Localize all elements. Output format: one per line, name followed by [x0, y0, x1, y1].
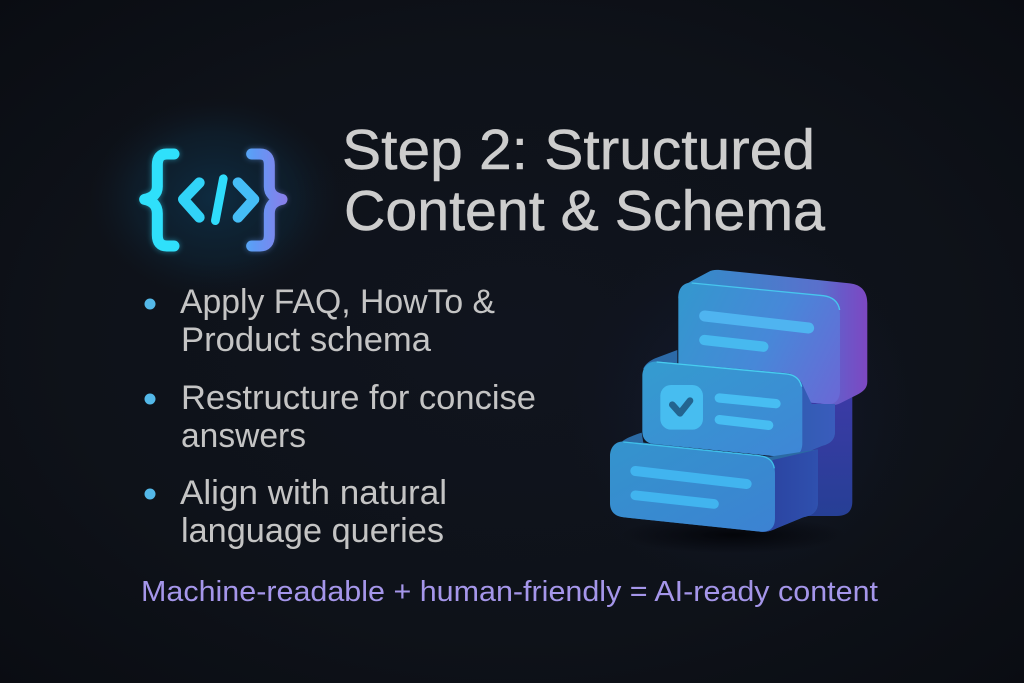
- bullet 3: Align with natural: [180, 474, 447, 512]
- left brace: [145, 154, 174, 246]
- bullet 3: [144, 474, 447, 550]
- bullet 2: [144, 379, 536, 455]
- text line: [719, 420, 769, 425]
- text line: [719, 398, 776, 404]
- bullet 1: [144, 283, 495, 359]
- illustration: stacked content cards: [565, 225, 925, 595]
- tagline: Machine-readable + human-friendly = AI-ready content: [141, 576, 878, 608]
- slash: [215, 179, 223, 221]
- title: [342, 118, 825, 243]
- bullet list: [144, 283, 536, 550]
- bottom card: [610, 433, 818, 532]
- text line: [635, 471, 747, 484]
- right chevron: [238, 183, 254, 217]
- top card: [678, 270, 867, 405]
- middle card: [642, 350, 835, 458]
- title: Step 2: Structured: [342, 118, 815, 182]
- left chevron: [183, 183, 199, 217]
- checkbox icon: [660, 385, 703, 430]
- text line: [705, 316, 809, 328]
- icon: code brackets: [90, 98, 340, 298]
- text line: [635, 495, 714, 504]
- bullet 2: answers: [181, 417, 306, 455]
- right brace: [252, 154, 282, 246]
- bullet 1: Product schema: [181, 321, 431, 359]
- ground shadow: [620, 517, 847, 553]
- bullet 2: Restructure for concise: [181, 379, 536, 417]
- bullet 1: Apply FAQ, HowTo &: [180, 283, 495, 321]
- bullet 3: language queries: [181, 512, 444, 550]
- text line: [704, 340, 763, 347]
- title: Content & Schema: [344, 179, 825, 243]
- back column: [803, 393, 852, 516]
